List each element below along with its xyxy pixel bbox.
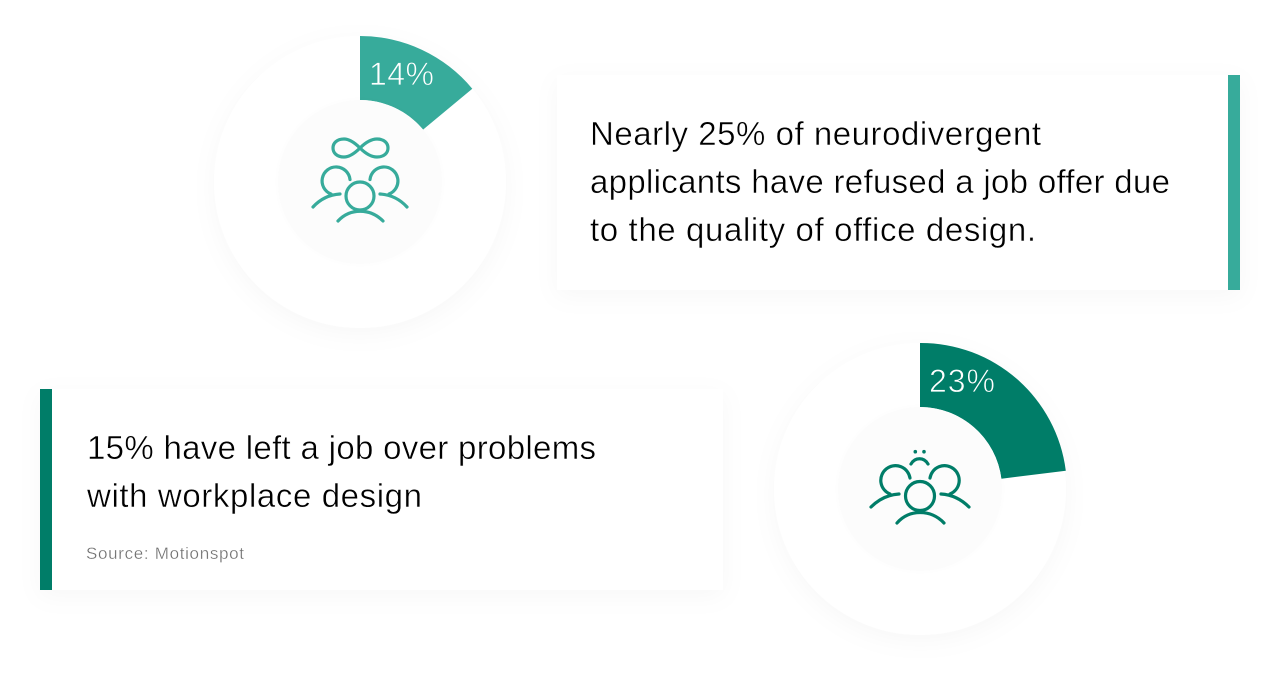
callout text [590,115,1170,248]
donut chart: 14% [214,36,506,328]
donut base [214,36,506,328]
callout text: Nearly 25% of neurodivergent [590,115,1041,152]
label: 14%: 14% [369,56,434,92]
callout text: with workplace design [86,477,422,514]
source note: Source: Motionspot [86,544,244,563]
accent bar [40,389,52,590]
callout text [86,429,596,514]
accent bar [1228,75,1240,290]
inner circle [838,407,1002,571]
card background [40,389,723,590]
callout text: applicants have refused a job offer due [590,163,1170,200]
icon: three people with infinity symbol [313,139,407,221]
wedge: 14% [360,36,472,130]
icon: three people with sad face [871,450,969,523]
inner circle [278,100,442,264]
label: 23%: 23% [929,363,995,399]
callout text: 15% have left a job over problems [87,429,596,466]
callout text: to the quality of office design. [590,211,1036,248]
card background [557,75,1240,290]
wedge: 23% [920,343,1066,479]
panel: left a job callout [40,389,723,590]
panel: refused job offer callout [557,75,1240,290]
donut chart: 23% [774,343,1066,635]
donut base [774,343,1066,635]
